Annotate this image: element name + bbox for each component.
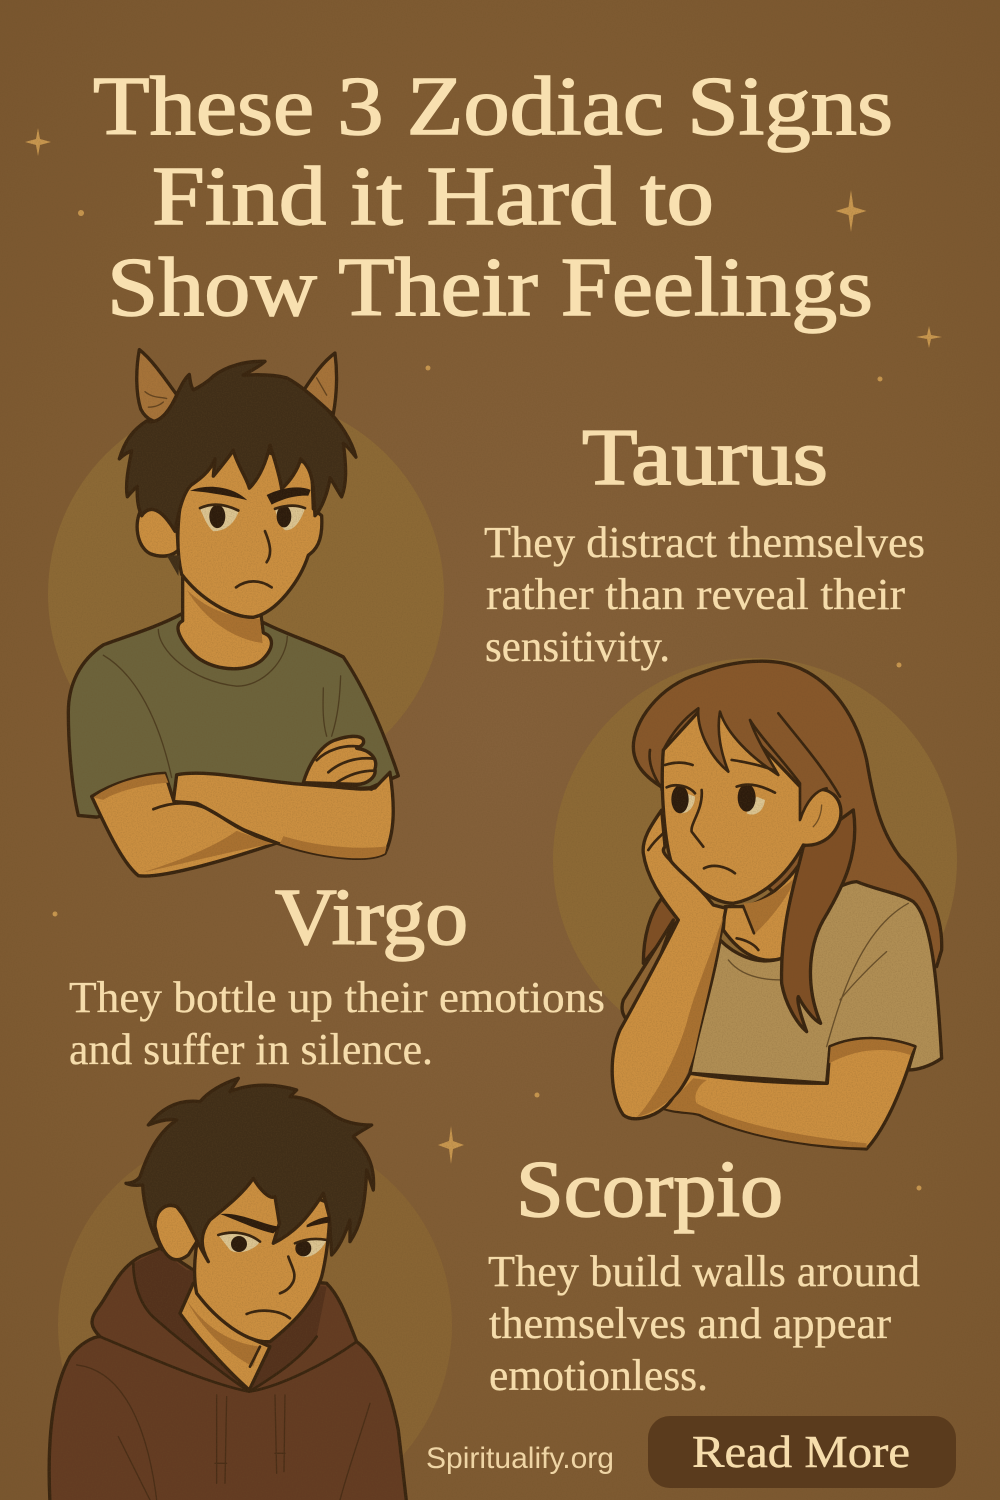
- text: Taurus description: rather than reveal their: [486, 570, 905, 619]
- text: Taurus description: They distract themselves: [484, 518, 925, 567]
- title: Find it Hard to: [152, 150, 714, 243]
- character: Scorpio boy: [49, 1078, 407, 1500]
- button: Read More: [648, 1416, 956, 1488]
- website label: Spiritualify.org: [426, 1442, 614, 1475]
- heading: Virgo: Virgo: [275, 874, 468, 962]
- backdrop circle: Taurus: [48, 396, 444, 792]
- backdrop circle: Scorpio: [58, 1128, 452, 1500]
- text: Virgo description: [69, 973, 605, 1074]
- text: Scorpio description: emotionless.: [489, 1351, 708, 1400]
- character: Virgo girl: [612, 661, 942, 1149]
- title: These 3 Zodiac Signs: [93, 60, 893, 153]
- text: Scorpio description: [488, 1247, 920, 1400]
- text: Scorpio description: They build walls around: [488, 1247, 920, 1296]
- character: Taurus boy: [68, 350, 398, 876]
- title: Show Their Feelings: [107, 241, 873, 334]
- text: Taurus description: [484, 518, 925, 671]
- text: Virgo description: and suffer in silence.: [69, 1025, 433, 1074]
- heading: Scorpio: Scorpio: [516, 1146, 783, 1234]
- text: Scorpio description: themselves and appear: [489, 1299, 891, 1348]
- text: Taurus description: sensitivity.: [485, 622, 670, 671]
- text: Virgo description: They bottle up their emotions: [69, 973, 605, 1022]
- backdrop circle: Virgo: [553, 658, 957, 1062]
- heading: Taurus: Taurus: [582, 414, 828, 502]
- title: [93, 60, 893, 334]
- sparkles: [25, 128, 942, 1190]
- button: Read More: Read More: [692, 1426, 910, 1477]
